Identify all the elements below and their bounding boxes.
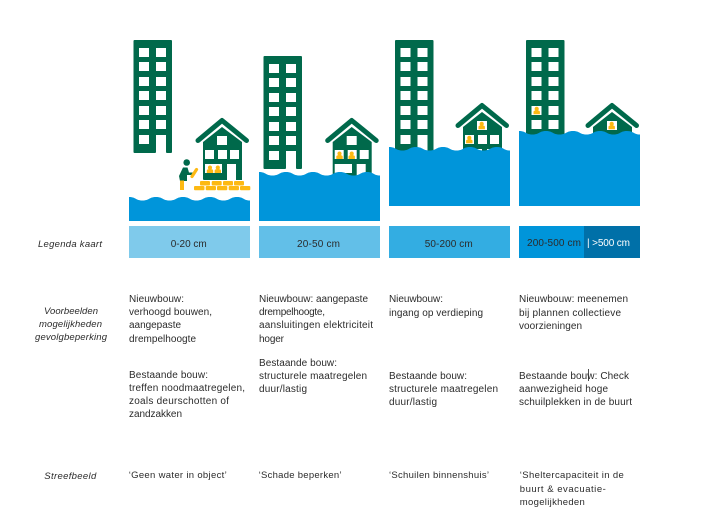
text: column 1 nieuwbouw [129,294,212,345]
legend: 20-50 cm [259,226,380,258]
legend: 0-20 cm: 0-20 cm [171,239,207,250]
icon: person carrying sandbag [179,159,196,190]
text: column 4 nieuwbouw: Nieuwbouw: meenemen [519,294,628,305]
legend: 200-500 cm and above 500 cm: | >500 cm [587,238,630,249]
label: Voorbeelden mogelijkheden gevolgbeperking: gevolgbeperking [35,332,108,343]
text: streefbeeld column 2: ‘Schade beperken’ [259,470,342,481]
water level [519,131,640,206]
text: column 1 nieuwbouw: drempelhoogte [129,334,196,345]
text: column 1 nieuwbouw: verhoogd bouwen, [129,307,212,318]
text: column 4 bestaande bouw: schuilplekken in de buurt [519,397,632,408]
text: column 2 nieuwbouw: aansluitingen elektriciteit [259,320,373,331]
label: Legenda kaart: Legenda kaart [38,239,102,250]
icon: tower block [395,40,434,153]
text: column 3 bestaande bouw: structurele maatregelen [389,384,498,395]
text: streefbeeld column 3: ‘Schuilen binnenshuis’ [389,470,489,481]
panel: 200-500 cm illustration [519,40,640,206]
text: column 2 bestaande bouw [259,358,367,395]
text: column 2 nieuwbouw: Nieuwbouw: aangepaste [259,294,368,305]
panel: 50-200 cm illustration [389,40,510,206]
icon: house with occupants [328,120,376,180]
text: streefbeeld column 4: mogelijkheden [520,497,585,508]
text: streefbeeld column 1: ‘Geen water in object’ [129,470,227,481]
legend: 0-20 cm [129,226,250,258]
icon: sandbags [194,181,250,190]
text: column 2 bestaande bouw: structurele maatregelen [259,371,367,382]
text: column 1 bestaande bouw: Bestaande bouw: [129,370,208,381]
text: streefbeeld column 4: ‘Sheltercapaciteit in de [520,470,624,481]
text: column 3 nieuwbouw [389,294,483,319]
text: column 1 bestaande bouw: zoals deurschotten of [129,396,229,407]
icon: tower block with occupant [526,40,564,153]
text: column 4 bestaande bouw: Bestaande bouw: Check [519,371,630,382]
label: Streefbeeld: Streefbeeld [44,471,97,482]
legend: 200-500 cm and above 500 cm: 200-500 cm [527,238,581,249]
water level [389,147,510,206]
text: column 2 nieuwbouw: hoger [259,334,285,345]
text: column 2 nieuwbouw: drempelhoogte, [259,307,325,318]
text: column 3 bestaande bouw [389,371,498,408]
legend: 20-50 cm: 20-50 cm [297,239,340,250]
water level [259,172,380,221]
text: column 4 nieuwbouw [519,294,628,332]
legend: 200-500 cm and above 500 cm [519,226,640,258]
label: Voorbeelden mogelijkheden gevolgbeperking: Voorbeelden [44,306,98,317]
icon: house with occupant [588,106,636,165]
text: column 4 bestaande bouw: aanwezigheid hoge [519,384,608,395]
icon: house with occupants [458,106,506,165]
text: column 4 bestaande bouw [519,369,632,408]
legend: 50-200 cm [389,226,510,258]
text: column 4 nieuwbouw: bij plannen collectieve [519,308,621,319]
label: Voorbeelden mogelijkheden gevolgbeperking [35,306,108,343]
text: column 1 bestaande bouw: zandzakken [129,409,182,420]
text: streefbeeld column 4: buurt & evacuatie- [520,484,606,495]
text: column 2 bestaande bouw: Bestaande bouw: [259,358,337,369]
label: Voorbeelden mogelijkheden gevolgbeperking: mogelijkheden [39,319,102,330]
legend: 50-200 cm: 50-200 cm [425,239,473,250]
text: column 3 bestaande bouw: duur/lastig [389,397,437,408]
icon: tower block [134,40,172,153]
panel: 0-20 cm illustration [129,40,250,221]
water level [129,197,250,221]
text: column 3 nieuwbouw: ingang op verdieping [389,308,483,319]
text: column 1 nieuwbouw: aangepaste [129,320,181,331]
text: column 1 bestaande bouw: treffen noodmaatregelen, [129,383,245,394]
text: column 4 nieuwbouw: voorzieningen [519,321,582,332]
panel: 20-50 cm illustration [259,56,380,221]
text: column 1 bestaande bouw [129,370,245,420]
icon: tower block [264,56,302,169]
text: column 3 bestaande bouw: Bestaande bouw: [389,371,467,382]
text: column 1 nieuwbouw: Nieuwbouw: [129,294,184,305]
text: streefbeeld column 4 [520,470,624,508]
text: column 2 bestaande bouw: duur/lastig [259,384,307,395]
text: column 2 nieuwbouw [259,294,373,345]
icon: house with occupants [198,120,246,180]
text: column 3 nieuwbouw: Nieuwbouw: [389,294,443,305]
